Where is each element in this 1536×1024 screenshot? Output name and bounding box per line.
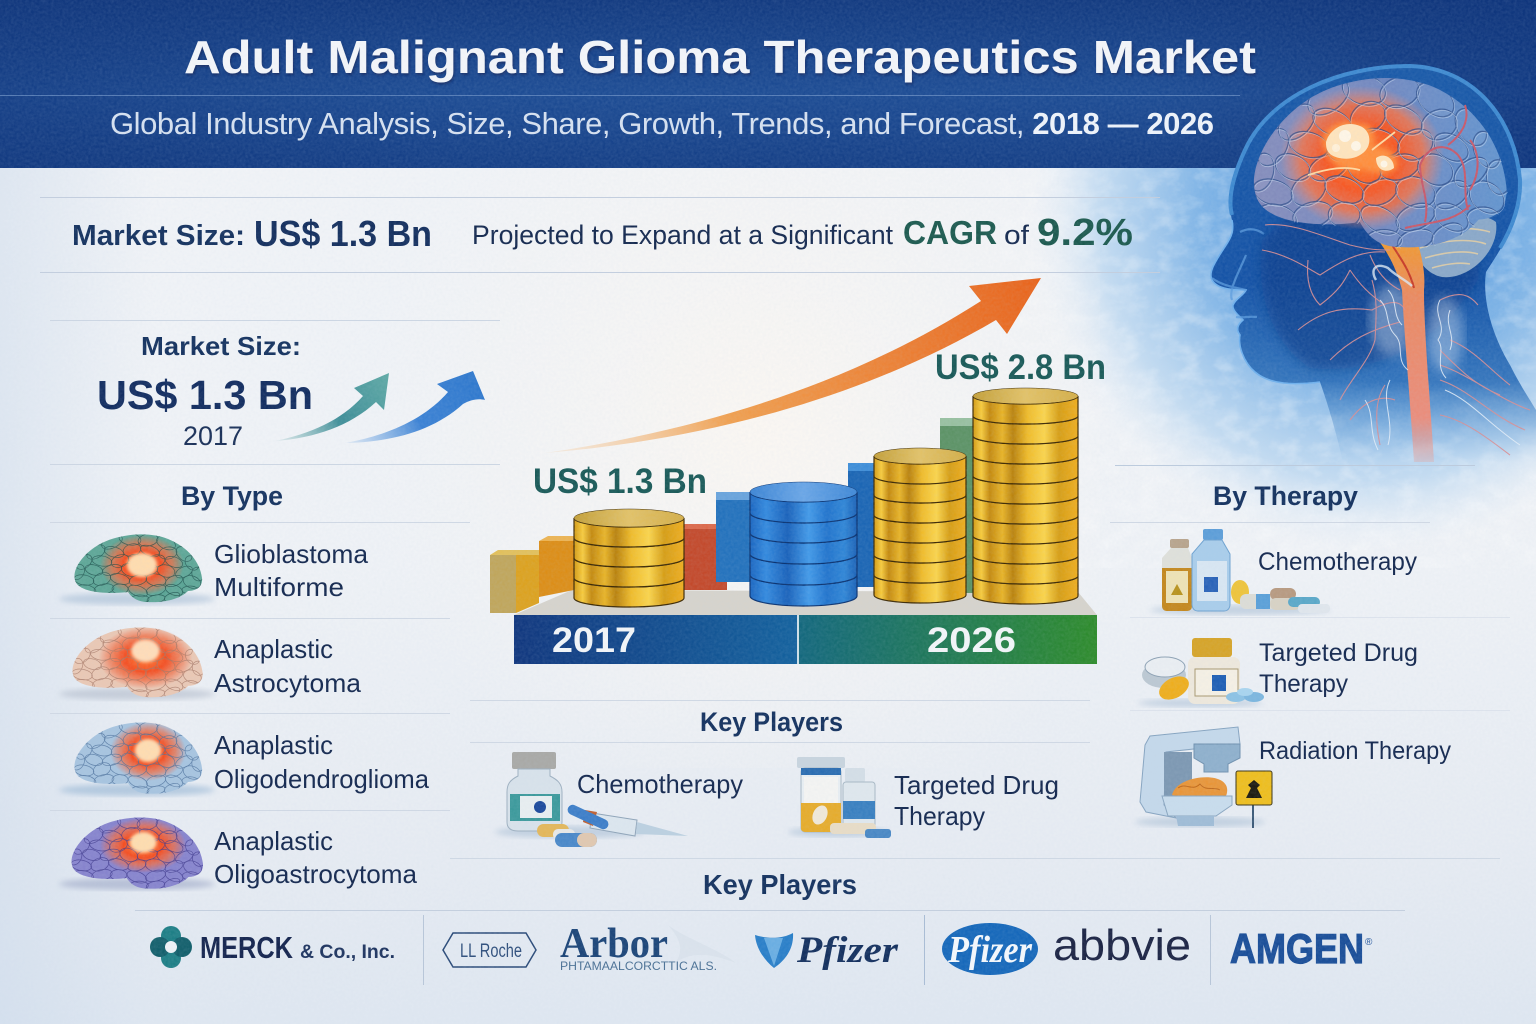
logo: Merck: & Co., Inc. — [300, 942, 395, 963]
head silhouette — [1211, 66, 1536, 462]
brain stem and spinal cord — [1378, 238, 1434, 462]
heading: Key Players — [700, 707, 843, 737]
logo: Amgen: ® — [1365, 937, 1373, 948]
panel: by type — [50, 481, 470, 891]
year banner 2026: 2026 — [927, 621, 1016, 660]
CAGR label: CAGR — [903, 214, 997, 251]
label: chemotherapy: Chemotherapy — [1258, 548, 1417, 576]
logo: Arbor — [560, 921, 736, 973]
label: targeted drug therapy: Targeted Drug — [1259, 639, 1418, 667]
year banner 2017: 2017 — [552, 621, 636, 660]
heading: By Type — [181, 481, 283, 511]
growth arrow — [545, 278, 1041, 453]
arrow: teal — [275, 373, 389, 441]
stack: gold 2017 — [574, 509, 684, 607]
logo: Pfizer oval: Pfizer — [947, 929, 1033, 971]
arrow: blue — [345, 371, 485, 443]
label: chemotherapy: Chemotherapy — [577, 769, 743, 799]
year banner 2017 — [514, 615, 798, 664]
subtitle: Global Industry Analysis, Size, Share, Growth, Trends, and Forecast, 2018 — 2026 — [110, 106, 1214, 141]
logo: LL Roche — [443, 933, 536, 967]
value: US$ 1.3 Bn — [97, 372, 313, 418]
nerves and vessel network — [1262, 225, 1530, 455]
label: targeted drug therapy — [894, 770, 1059, 831]
stack: gold middle — [874, 448, 966, 603]
skull rim — [1231, 66, 1520, 248]
stack: gold 2026 — [973, 388, 1078, 604]
white neural lace — [1370, 284, 1463, 373]
logo: AbbVie: abbvie — [1053, 921, 1191, 970]
icon: targeted drug bottles — [788, 757, 891, 838]
item: glioblastoma multiforme — [59, 531, 369, 605]
market size label: Market Size: — [72, 220, 245, 252]
illustration: human head with brain tumor — [1211, 66, 1536, 462]
item: anaplastic oligodendroglioma: Oligodendroglioma — [214, 764, 430, 794]
stack: blue — [750, 482, 857, 606]
CAGR value: 9.2% — [1037, 212, 1133, 254]
tumor core — [1308, 122, 1398, 175]
market size value: US$ 1.3 Bn — [254, 213, 432, 254]
item: anaplastic astrocytoma: Anaplastic — [214, 634, 333, 664]
label: targeted drug therapy: Targeted Drug — [894, 770, 1059, 800]
heading: Key Players — [703, 869, 857, 900]
year banner 2026 — [797, 615, 1097, 664]
face rim light — [1211, 220, 1320, 384]
cerebrum — [1243, 70, 1515, 255]
heading: Market Size: — [141, 331, 301, 361]
label: radiation therapy: Radiation Therapy — [1259, 737, 1451, 765]
logo: Amgen: AMGEN — [1230, 925, 1364, 972]
icon: targeted therapy jar and pills — [1138, 638, 1264, 707]
title: Adult Malignant Glioma Therapeutics Market — [184, 31, 1256, 83]
header band — [0, 0, 1536, 168]
item: anaplastic oligodendroglioma — [59, 719, 430, 796]
value label 2026: US$ 2.8 Bn — [935, 348, 1106, 387]
item: glioblastoma multiforme: Multiforme — [214, 572, 344, 602]
panel: market size 2017 — [50, 320, 500, 465]
logo: Arbor: PHTAMAALCORCTTIC ALS. — [560, 959, 717, 973]
panel: key players therapies — [470, 700, 1090, 847]
item: anaplastic oligoastrocytoma — [59, 814, 418, 891]
facial shading — [1212, 229, 1264, 317]
icon: radiation therapy machine — [1135, 727, 1272, 828]
of: of — [1004, 220, 1030, 250]
bar chart: coin stacks 2017 to 2026 — [490, 348, 1106, 664]
projection text: Projected to Expand at a Significant — [472, 220, 893, 250]
item: glioblastoma multiforme: Glioblastoma — [214, 539, 369, 569]
label: targeted drug therapy: Therapy — [1259, 670, 1348, 698]
year: 2017 — [183, 421, 243, 451]
logo: Arbor: Arbor — [560, 921, 668, 967]
panel: by therapy — [1110, 465, 1510, 828]
background bars — [490, 418, 973, 613]
item: anaplastic oligodendroglioma: Anaplastic — [214, 730, 333, 760]
item: anaplastic astrocytoma — [59, 624, 362, 700]
blood vessels — [1405, 105, 1478, 228]
heading: By Therapy — [1213, 481, 1358, 511]
logo: Pfizer shield: Pfizer — [796, 930, 899, 971]
platform — [514, 590, 1097, 615]
icon: chemotherapy bottles and pills — [1150, 529, 1330, 615]
label: targeted drug therapy — [1259, 639, 1418, 698]
logo: Pfizer shield — [755, 930, 899, 971]
label: targeted drug therapy: Therapy — [894, 801, 985, 831]
item: anaplastic oligoastrocytoma: Anaplastic — [214, 826, 333, 856]
item: anaplastic astrocytoma: Astrocytoma — [214, 668, 362, 698]
item: anaplastic oligoastrocytoma: Oligoastrocytoma — [214, 859, 418, 889]
logo: LL Roche: LL Roche — [460, 941, 522, 962]
logo: Merck: MERCK — [200, 930, 293, 965]
market size and CAGR strip — [40, 197, 1160, 273]
panel: key players logos — [135, 858, 1500, 985]
icon: vial, pills and syringe — [495, 752, 688, 847]
cerebellum — [1410, 215, 1496, 277]
logo: Merck — [150, 926, 395, 968]
value label 2017: US$ 1.3 Bn — [533, 462, 707, 501]
